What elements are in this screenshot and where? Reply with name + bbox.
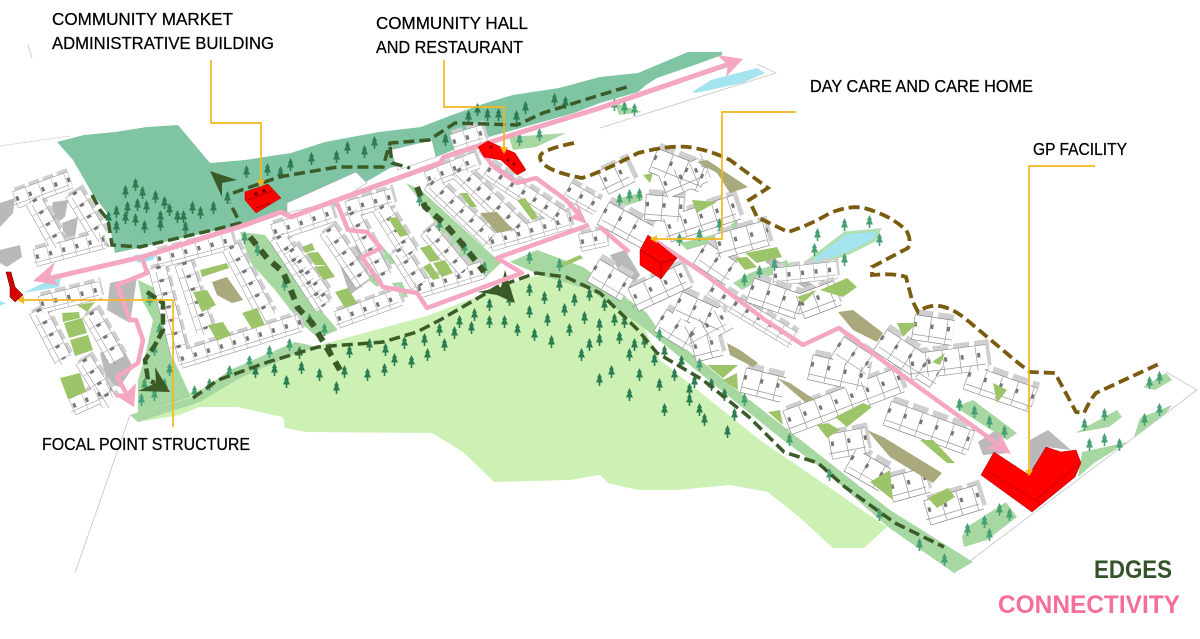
red key buildings [6,141,1081,512]
large housing blocks [592,155,1036,520]
leader: community market [211,60,261,183]
arrowhead centre [478,270,515,303]
legend: connectivity: CONNECTIVITY [998,591,1180,619]
arrowheads [33,55,1011,454]
leader: community hall [444,60,504,150]
south-east spine [480,150,582,218]
medium green planting strips [130,103,1172,573]
leader: day care [652,112,796,239]
label: day care: DAY CARE AND CARE HOME [810,76,1033,96]
focal point structure [6,272,23,302]
leader: GP facility [1029,166,1095,473]
olive shared gardens [212,160,942,483]
label: community hall: COMMUNITY HALL [376,13,528,33]
label: community hall: AND RESTAURANT [376,37,523,57]
leader arrowheads [17,147,1033,476]
edges: dark green dashed paths [92,87,1161,547]
teal woodland belt [57,52,722,253]
legend: edges: EDGES [1094,556,1172,584]
central loop [337,203,589,308]
arrowhead west [138,367,170,392]
arrowhead north [210,171,237,197]
day care building [640,235,677,279]
north woodland edge path [92,87,627,247]
western route [117,257,147,403]
main northern spine [42,62,735,280]
green courtyards [60,173,1007,508]
connectivity: pink routes [33,55,1011,454]
label: GP facility: GP FACILITY [1033,139,1127,159]
western edge path [145,292,163,383]
long south-east route [600,227,1003,448]
yellow callout lines [17,60,1095,476]
terraced housing rows [14,129,839,412]
water bodies [0,68,879,306]
light green woodland field [130,270,887,548]
GP facility building [981,447,1081,512]
community hall building [478,141,526,175]
label: focal point: FOCAL POINT STRUCTURE [42,434,250,454]
cast shadows [0,197,1071,478]
planting trees [142,105,1160,560]
leader: focal point [19,300,173,427]
brown northern edge path [540,143,1161,413]
community market building [245,184,281,213]
central green strip paths [250,187,484,370]
label: community market: ADMINISTRATIVE BUILDING [52,33,274,53]
white building plots in woodland [287,132,490,213]
south woodland edge path [193,273,944,547]
label: community market: COMMUNITY MARKET [52,9,233,29]
woodland trees [109,100,735,432]
